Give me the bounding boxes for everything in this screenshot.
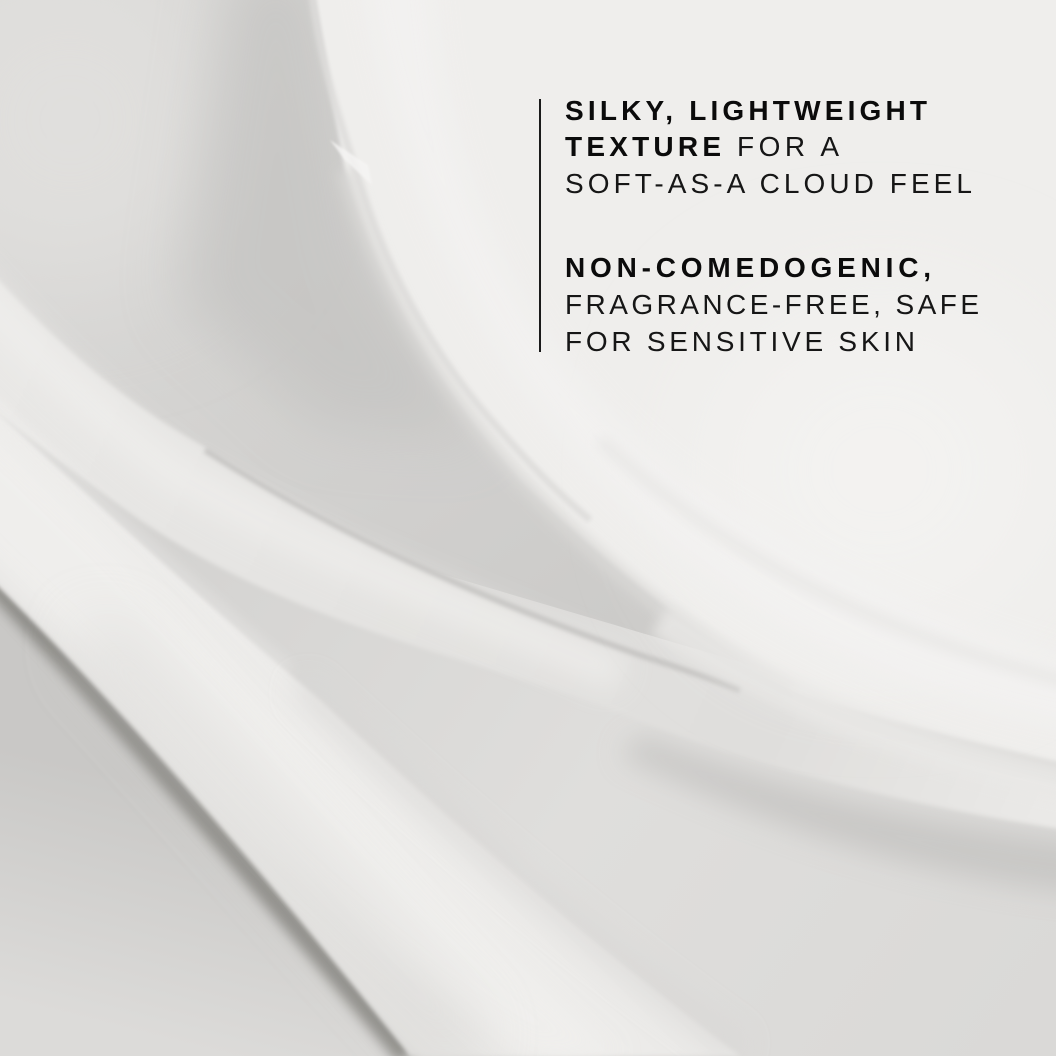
- text block: silky lightweight texture: FOR A: [737, 131, 839, 162]
- cream swirl top right: [308, 0, 1056, 800]
- text block: silky lightweight texture: TEXTURE: [565, 131, 721, 162]
- text block: non-comedogenic: FRAGRANCE-FREE, SAFE: [565, 289, 979, 320]
- text block: silky lightweight texture: SOFT-AS-A CLOUD FEEL: [565, 168, 972, 199]
- text block: non-comedogenic: NON-COMEDOGENIC,: [565, 252, 931, 283]
- vertical divider line: [539, 99, 541, 352]
- text block: non-comedogenic: FOR SENSITIVE SKIN: [565, 326, 915, 357]
- text block: silky lightweight texture: [565, 95, 972, 199]
- shadow beneath the cream swirl: [620, 735, 1056, 900]
- dark shadow along lower ribbon: [0, 545, 408, 1056]
- text block: non-comedogenic: [565, 252, 979, 357]
- lower middle surface: [0, 420, 1056, 1056]
- text block: silky lightweight texture: SILKY, LIGHTWEIGHT: [565, 95, 927, 126]
- bottom-left surface: [0, 510, 410, 1056]
- main white ribbon: [0, 355, 740, 1056]
- cream ribbon across centre: [0, 215, 1056, 840]
